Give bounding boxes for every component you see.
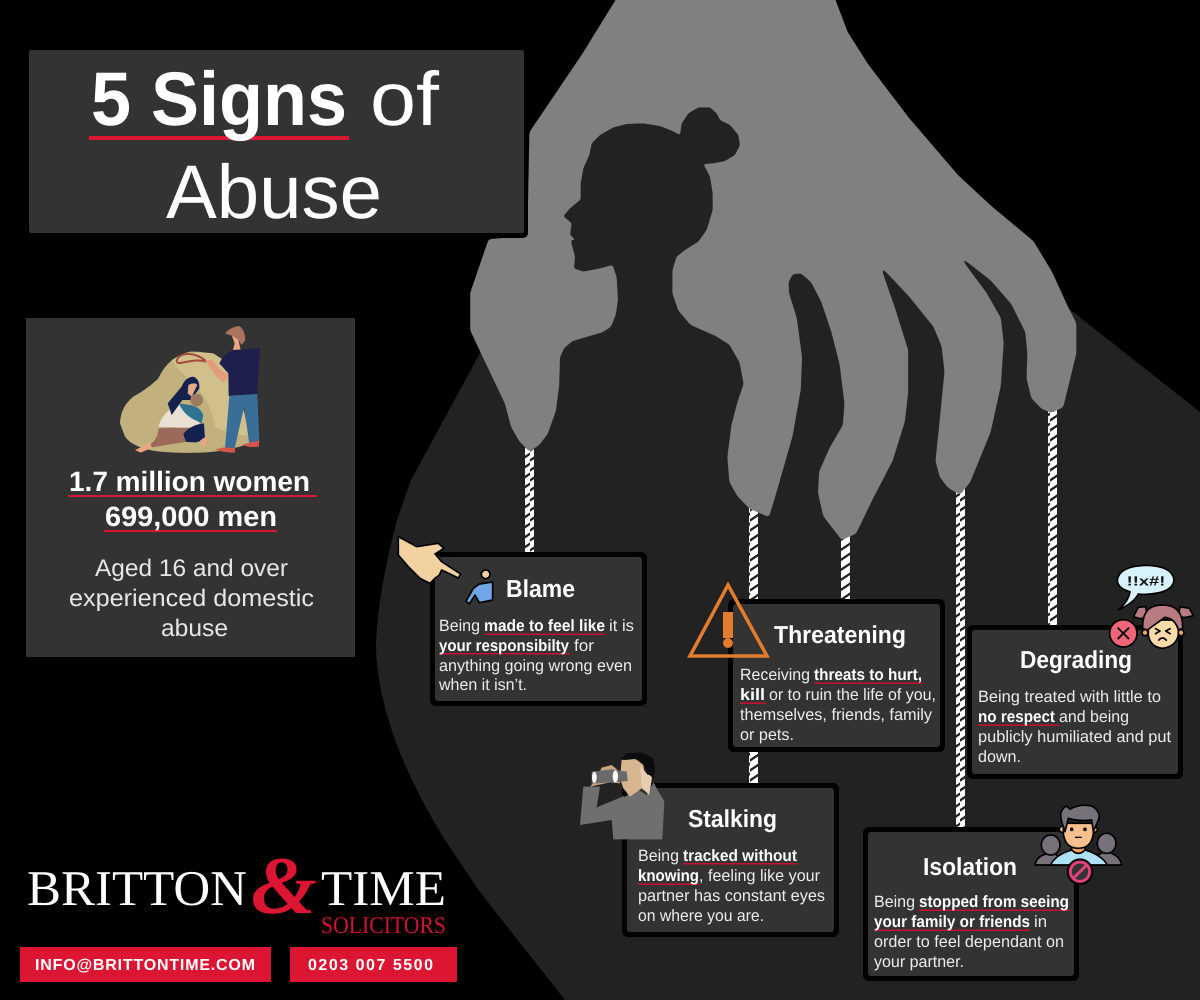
title text: Abuse <box>166 150 382 235</box>
stat description: Aged 16 and over <box>95 555 288 582</box>
stat figures: 1.7 million women <box>69 466 310 497</box>
stat underlines <box>68 495 317 532</box>
logo: Britton & Time Solicitors: TIME <box>321 860 446 916</box>
body text: order to feel dependant on <box>874 933 1064 951</box>
icon: man with binoculars <box>580 752 664 839</box>
body text <box>978 688 1171 766</box>
stat description: abuse <box>161 615 228 642</box>
body text: your responsibilty <box>439 637 570 655</box>
card: Degrading <box>967 565 1193 779</box>
logo: Britton & Time Solicitors: SOLICITORS <box>321 913 446 939</box>
puppet strings <box>525 405 1057 830</box>
body text: Being <box>439 617 480 635</box>
body text: your family or friends <box>874 913 1030 931</box>
speech bubble: !!x#! <box>1127 574 1165 588</box>
key phrase underlines <box>439 634 605 654</box>
body text: kill <box>740 686 765 704</box>
contact button: phone <box>290 947 457 982</box>
body text: tracked without <box>683 847 798 865</box>
heading: Stalking <box>688 806 777 833</box>
body text: stopped from seeing <box>919 893 1069 911</box>
body text: Being <box>638 847 679 865</box>
card: Isolation <box>863 805 1122 981</box>
body text: threats to hurt, <box>814 666 922 684</box>
statistics panel <box>26 318 355 657</box>
red cross badge <box>1110 620 1137 647</box>
body text: in <box>1034 913 1047 931</box>
body text <box>438 617 634 694</box>
stat description: experienced domestic <box>69 585 314 612</box>
stat figures <box>69 466 310 532</box>
icon: warning triangle <box>690 585 767 656</box>
key phrase underlines <box>740 682 922 704</box>
heading: Degrading <box>1020 647 1132 674</box>
heading: Blame <box>506 576 575 603</box>
illustration: abuse scene <box>120 326 260 453</box>
stat description <box>69 555 314 642</box>
prohibition badge <box>1067 858 1093 885</box>
title text: of <box>370 57 440 142</box>
body text: knowing <box>638 867 699 885</box>
heading: Isolation <box>923 854 1017 881</box>
icon: swearing girl <box>1110 565 1193 648</box>
body text: , feeling like your <box>699 867 821 885</box>
body text: it is <box>609 617 634 635</box>
body text: no respect <box>978 708 1056 726</box>
woman's head silhouette <box>563 107 740 307</box>
card: Blame <box>398 537 647 706</box>
body text: Receiving <box>740 666 810 684</box>
body text: or to ruin the life of you, <box>769 686 936 704</box>
body text: or pets. <box>740 726 794 744</box>
card: Stalking <box>580 752 839 937</box>
body text: for <box>574 637 595 655</box>
title panel <box>24 45 528 238</box>
logo: Britton & Time Solicitors: & <box>251 840 317 931</box>
contact button: phone: 0203 007 5500 <box>308 957 433 974</box>
icon: isolated man <box>1035 805 1122 885</box>
body text: on where you are. <box>638 907 764 925</box>
body text: themselves, friends, family <box>740 706 933 724</box>
body text: when it isn’t. <box>438 676 527 694</box>
body text <box>874 893 1069 971</box>
icon: pointing hand <box>398 537 461 583</box>
logo: Britton & Time Solicitors <box>27 840 446 939</box>
body text <box>740 666 936 744</box>
body text <box>638 847 825 925</box>
icon: crouching person <box>466 570 493 604</box>
key phrase underlines <box>638 863 797 885</box>
title underline <box>89 136 349 140</box>
title text: 5 Signs <box>91 57 347 142</box>
contact button: email: INFO@BRITTONTIME.COM <box>35 957 255 974</box>
body text: publicly humiliated and put <box>978 728 1171 746</box>
stat figures: 699,000 men <box>105 501 277 532</box>
heading: Threatening <box>774 622 906 649</box>
body text: your partner. <box>874 953 964 971</box>
woman body silhouette background <box>376 100 1200 1000</box>
key phrase underline <box>978 724 1059 726</box>
body text: made to feel like <box>484 617 605 635</box>
body text: down. <box>978 748 1021 766</box>
logo: Britton & Time Solicitors: BRITTON <box>27 860 247 916</box>
body text: Being <box>874 893 915 911</box>
controlling hand silhouette <box>470 0 1076 540</box>
card: Threatening <box>690 585 945 752</box>
body text: partner has constant eyes <box>638 887 825 905</box>
key phrase underlines <box>874 910 1070 931</box>
body text: and being <box>1059 708 1129 726</box>
body text: Being treated with little to <box>978 688 1161 706</box>
title text <box>91 57 440 235</box>
contact button: email <box>20 947 271 982</box>
body text: anything going wrong even <box>439 657 632 675</box>
